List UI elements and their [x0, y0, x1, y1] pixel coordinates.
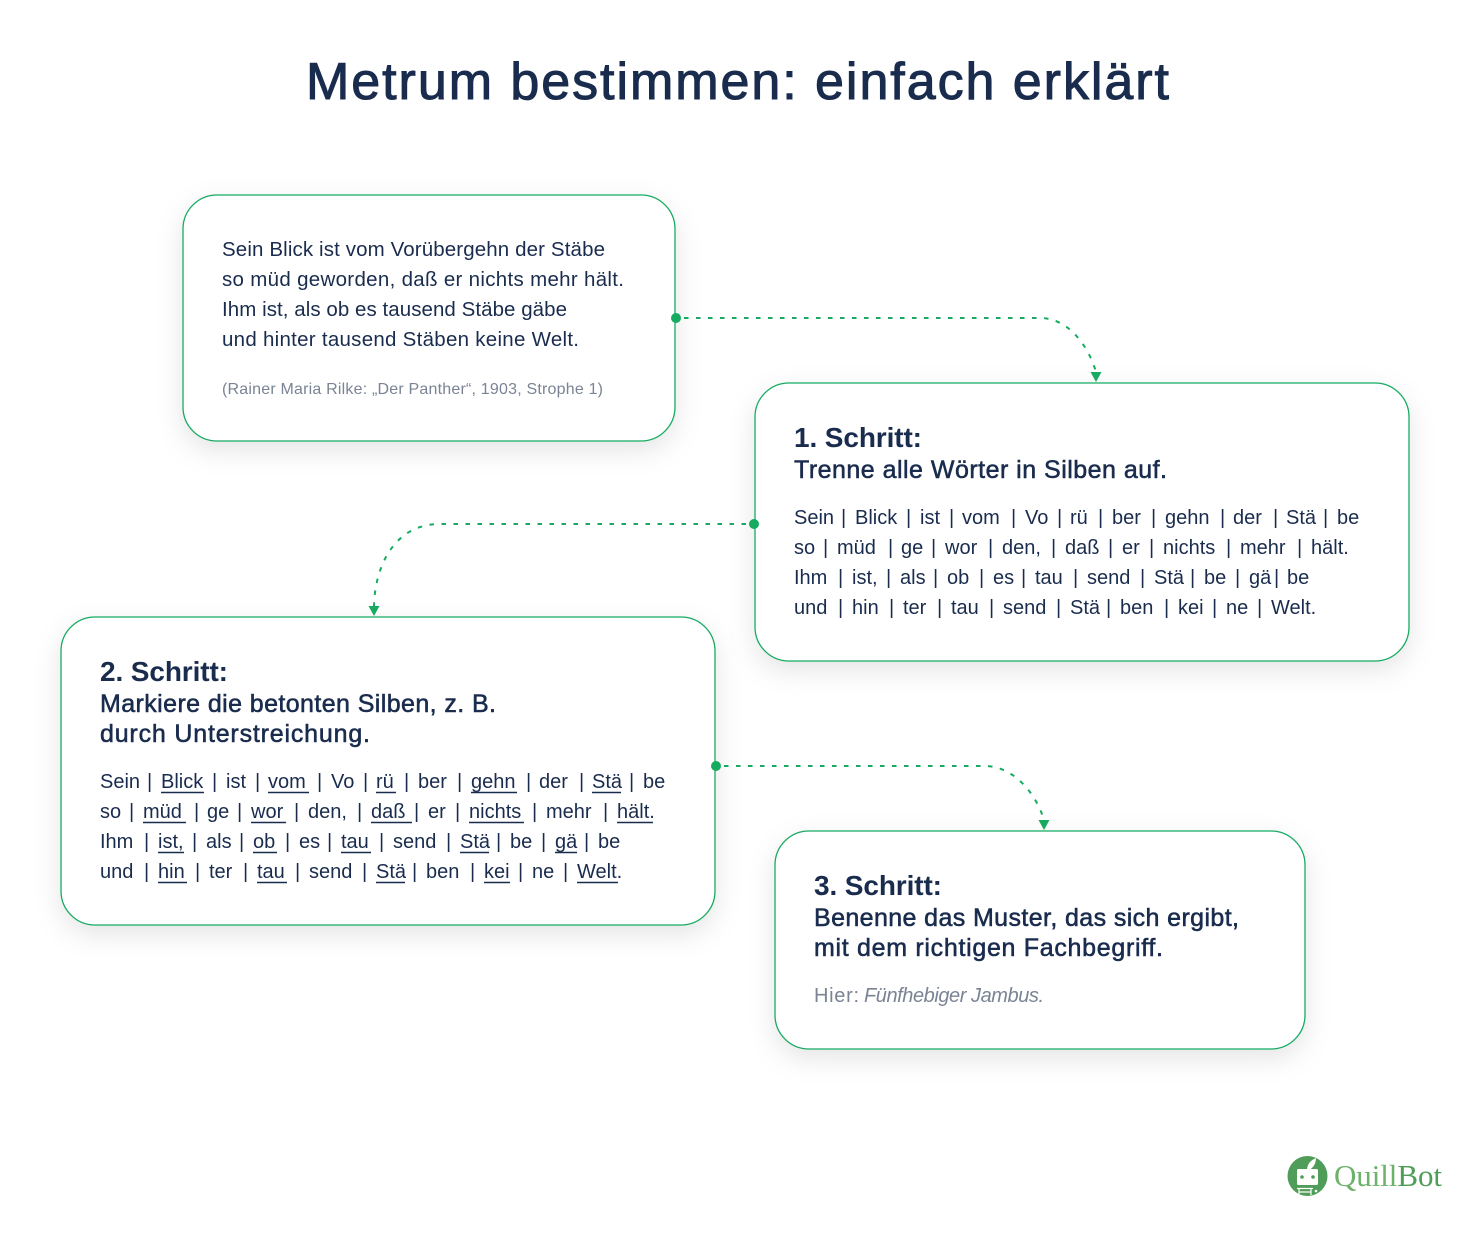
step 1 syllables: be: [1204, 567, 1226, 589]
step 2 underlined syllables: |: [144, 831, 149, 853]
step 2 underlined syllables: |: [194, 801, 199, 823]
step 2 underlined syllables: daß: [371, 801, 405, 823]
step 1 syllables: vom: [962, 507, 1000, 529]
step 1 syllables: tau: [951, 597, 979, 619]
step 2 underlined syllables: ge: [207, 801, 229, 823]
step 2 underlined syllables: |: [603, 801, 608, 823]
step 1 syllables: es: [993, 567, 1014, 589]
step 2 underlined syllables: und: [100, 861, 133, 883]
step 1 syllables: |: [1098, 507, 1103, 529]
step 1 syllables: Blick: [855, 507, 898, 529]
step 1 syllables: send: [1003, 597, 1046, 619]
step 1 syllables: |: [841, 507, 846, 529]
step 2 underlined syllables: |: [243, 861, 248, 883]
step 1 syllables: Stä: [1070, 597, 1101, 619]
step 1 syllables: Vo: [1025, 507, 1048, 529]
step 1 syllables: |: [937, 597, 942, 619]
step 1 syllables: gä: [1249, 567, 1272, 589]
step 1 syllables: ben: [1120, 597, 1153, 619]
arrow: step 2 to step 3: [711, 761, 1050, 830]
step 1 syllables: rü: [1070, 507, 1088, 529]
step 2 instruction: [100, 690, 496, 748]
step 1 syllables: ist,: [852, 567, 878, 589]
step 1 syllables: |: [1057, 507, 1062, 529]
step 1 syllables: |: [949, 507, 954, 529]
step 2 underlined syllables: wor: [250, 801, 284, 823]
step 2 underlined syllables: ben: [426, 861, 459, 883]
step 2 underlined syllables: ber: [418, 771, 447, 793]
step 1 syllables: gehn: [1165, 507, 1210, 529]
step 2 underlined syllables: |: [379, 831, 384, 853]
step 1 syllables: tau: [1035, 567, 1063, 589]
step 1 syllables: daß: [1065, 537, 1099, 559]
step 2 underlined syllables: |: [526, 771, 531, 793]
poem text: Ihm ist, als ob es tausend Stäbe gäbe: [222, 298, 567, 321]
arrow: step 1 to step 2: [368, 519, 759, 616]
step 2 heading: 2. Schritt:: [100, 656, 228, 687]
step 3 instruction: Benenne das Muster, das sich ergibt,: [814, 904, 1239, 932]
step 1 syllables: |: [886, 567, 891, 589]
step 1 syllables: |: [1220, 507, 1225, 529]
step 2 underlined syllables: |: [446, 831, 451, 853]
step 1 syllables: |: [931, 537, 936, 559]
step 1 syllables: der: [1233, 507, 1262, 529]
step 1 syllables: hält.: [1311, 537, 1349, 559]
step 2 underlined syllables: rü: [376, 771, 394, 793]
step 2 underlined syllables: [100, 771, 665, 883]
step 1 syllables: |: [1212, 597, 1217, 619]
step 2 underlined syllables: Stä: [376, 861, 407, 883]
step 1 syllables: |: [1235, 567, 1240, 589]
poem text: und hinter tausend Stäben keine Welt.: [222, 328, 579, 351]
step 1 syllables: |: [888, 537, 893, 559]
step 2 underlined syllables: Stä: [592, 771, 623, 793]
step 1 syllables: be: [1337, 507, 1359, 529]
title: Metrum bestimmen: einfach erklärt: [306, 53, 1170, 111]
step 3 heading: 3. Schritt:: [814, 870, 942, 901]
step 1 syllables: ob: [947, 567, 969, 589]
panel: poem: [183, 195, 675, 441]
poem text: [222, 238, 624, 351]
step 2 underlined syllables: müd: [143, 801, 182, 823]
step 2 underlined syllables: |: [584, 831, 589, 853]
step 1 syllables: |: [979, 567, 984, 589]
step 1 heading: 1. Schritt:: [794, 422, 922, 453]
logo wordmark: QuillBot: [1334, 1158, 1442, 1193]
step 1 syllables: |: [989, 597, 994, 619]
step 1 syllables: und: [794, 597, 827, 619]
panel: step 3: [775, 831, 1305, 1049]
step 3 answer: Hier:: [814, 985, 859, 1007]
step 2 underlined syllables: |: [579, 771, 584, 793]
step 1 syllables: be: [1287, 567, 1309, 589]
step 2 underlined syllables: |: [239, 831, 244, 853]
step 2 underlined syllables: nichts: [469, 801, 521, 823]
step 2 underlined syllables: den,: [308, 801, 347, 823]
step 1 syllables: |: [838, 567, 843, 589]
step 2 underlined syllables: mehr: [546, 801, 592, 823]
step 2 underlined syllables: |: [144, 861, 149, 883]
step 1 syllables: |: [1106, 597, 1111, 619]
step 1 syllables: |: [1108, 537, 1113, 559]
step 1 syllables: ge: [901, 537, 923, 559]
step 2 underlined syllables: tau: [341, 831, 369, 853]
step 1 syllables: Welt.: [1271, 597, 1316, 619]
step 2 underlined syllables: |: [455, 801, 460, 823]
step 1 syllables: ne: [1226, 597, 1248, 619]
step 1 syllables: |: [1273, 507, 1278, 529]
step 1 syllables: |: [1149, 537, 1154, 559]
step 1 syllables: |: [1021, 567, 1026, 589]
step 2 underlined syllables: hin: [158, 861, 185, 883]
step 2 underlined syllables: |: [147, 771, 152, 793]
step 1 syllables: ist: [920, 507, 940, 529]
step 3 answer: Fünfhebiger Jambus.: [864, 985, 1044, 1007]
step 1 syllables: |: [1140, 567, 1145, 589]
step 2 underlined syllables: |: [237, 801, 242, 823]
step 1 syllables: |: [1297, 537, 1302, 559]
step 2 underlined syllables: hält.: [617, 801, 655, 823]
step 1 syllables: |: [1226, 537, 1231, 559]
step 2 underlined syllables: |: [412, 861, 417, 883]
step 1 syllables: |: [1056, 597, 1061, 619]
logo: QuillBot: [1288, 1156, 1442, 1196]
icon: robot: [1288, 1156, 1328, 1196]
step 1 syllables: Sein: [794, 507, 834, 529]
step 1 syllables: hin: [852, 597, 879, 619]
poem text: so müd geworden, daß er nichts mehr hält.: [222, 268, 624, 291]
step 1 syllables: müd: [837, 537, 876, 559]
step 2 underlined syllables: |: [195, 861, 200, 883]
step 1 syllables: |: [1151, 507, 1156, 529]
step 1 instruction: Trenne alle Wörter in Silben auf.: [794, 456, 1167, 484]
step 2 underlined syllables: Sein: [100, 771, 140, 793]
step 1 syllables: nichts: [1163, 537, 1215, 559]
step 1 syllables: |: [1051, 537, 1056, 559]
step 2 underlined syllables: |: [294, 801, 299, 823]
step 2 underlined syllables: als: [206, 831, 232, 853]
step 2 underlined syllables: |: [357, 801, 362, 823]
step 1 syllables: ber: [1112, 507, 1141, 529]
step 1 syllables: |: [1164, 597, 1169, 619]
step 1 syllables: |: [988, 537, 993, 559]
step 1 syllables: |: [1011, 507, 1016, 529]
step 2 instruction: durch Unterstreichung.: [100, 720, 370, 748]
step 2 underlined syllables: so: [100, 801, 121, 823]
step 3 instruction: mit dem richtigen Fachbegriff.: [814, 934, 1163, 962]
step 1 syllables: er: [1122, 537, 1140, 559]
step 2 underlined syllables: tau: [257, 861, 285, 883]
step 2 underlined syllables: send: [309, 861, 352, 883]
step 2 underlined syllables: |: [129, 801, 134, 823]
step 2 underlined syllables: Welt.: [577, 861, 622, 883]
step 1 syllables: |: [889, 597, 894, 619]
step 3 instruction: [814, 904, 1239, 962]
step 1 syllables: |: [933, 567, 938, 589]
panel: step 2: [61, 617, 715, 925]
step 2 underlined syllables: send: [393, 831, 436, 853]
step 1 syllables: als: [900, 567, 926, 589]
step 1 syllables: Ihm: [794, 567, 827, 589]
step 2 underlined syllables: |: [518, 861, 523, 883]
step 2 underlined syllables: Blick: [161, 771, 204, 793]
step 1 syllables: |: [1190, 567, 1195, 589]
step 2 underlined syllables: |: [192, 831, 197, 853]
step 1 syllables: |: [1323, 507, 1328, 529]
step 1 syllables: |: [906, 507, 911, 529]
step 1 syllables: |: [1073, 567, 1078, 589]
step 2 underlined syllables: gä: [555, 831, 578, 853]
step 2 underlined syllables: |: [541, 831, 546, 853]
step 2 underlined syllables: der: [539, 771, 568, 793]
step 2 underlined syllables: er: [428, 801, 446, 823]
step 1 syllables: |: [1257, 597, 1262, 619]
step 2 underlined syllables: Ihm: [100, 831, 133, 853]
step 2 underlined syllables: ist,: [158, 831, 184, 853]
step 2 underlined syllables: Stä: [460, 831, 491, 853]
step 2 underlined syllables: ne: [532, 861, 554, 883]
step 1 syllables: send: [1087, 567, 1130, 589]
step 2 underlined syllables: |: [470, 861, 475, 883]
step 1 syllables: ter: [903, 597, 927, 619]
step 1 syllables: mehr: [1240, 537, 1286, 559]
step 1 syllables: Stä: [1154, 567, 1185, 589]
step 2 underlined syllables: be: [643, 771, 665, 793]
panel: step 1: [755, 383, 1409, 661]
step 1 syllables: Stä: [1286, 507, 1317, 529]
step 2 underlined syllables: |: [363, 771, 368, 793]
step 2 underlined syllables: |: [317, 771, 322, 793]
step 2 underlined syllables: |: [404, 771, 409, 793]
step 2 underlined syllables: be: [510, 831, 532, 853]
step 2 underlined syllables: |: [295, 861, 300, 883]
step 2 underlined syllables: |: [212, 771, 217, 793]
step 2 underlined syllables: |: [629, 771, 634, 793]
step 2 underlined syllables: |: [496, 831, 501, 853]
step 2 underlined syllables: |: [285, 831, 290, 853]
step 2 underlined syllables: be: [598, 831, 620, 853]
step 1 syllables: kei: [1178, 597, 1204, 619]
poem text: Sein Blick ist vom Vorübergehn der Stäbe: [222, 238, 605, 261]
step 1 syllables: wor: [944, 537, 978, 559]
step 1 syllables: |: [838, 597, 843, 619]
step 2 underlined syllables: ter: [209, 861, 233, 883]
step 1 syllables: |: [823, 537, 828, 559]
step 2 underlined syllables: |: [255, 771, 260, 793]
step 2 underlined syllables: kei: [484, 861, 510, 883]
step 1 syllables: so: [794, 537, 815, 559]
step 2 underlined syllables: |: [532, 801, 537, 823]
arrow: poem to step 1: [671, 313, 1102, 382]
step 2 underlined syllables: Vo: [331, 771, 354, 793]
step 2 underlined syllables: |: [362, 861, 367, 883]
step 1 syllables: den,: [1002, 537, 1041, 559]
poem citation: (Rainer Maria Rilke: „Der Panther“, 1903, Strophe 1): [222, 381, 603, 398]
step 2 instruction: Markiere die betonten Silben, z. B.: [100, 690, 496, 718]
step 2 underlined syllables: vom: [268, 771, 306, 793]
step 1 syllables: [794, 507, 1359, 619]
step 2 underlined syllables: ob: [253, 831, 275, 853]
step 2 underlined syllables: es: [299, 831, 320, 853]
step 2 underlined syllables: gehn: [471, 771, 516, 793]
step 2 underlined syllables: |: [327, 831, 332, 853]
step 1 syllables: |: [1274, 567, 1279, 589]
step 2 underlined syllables: ist: [226, 771, 246, 793]
step 2 underlined syllables: |: [457, 771, 462, 793]
step 2 underlined syllables: |: [563, 861, 568, 883]
step 2 underlined syllables: |: [414, 801, 419, 823]
